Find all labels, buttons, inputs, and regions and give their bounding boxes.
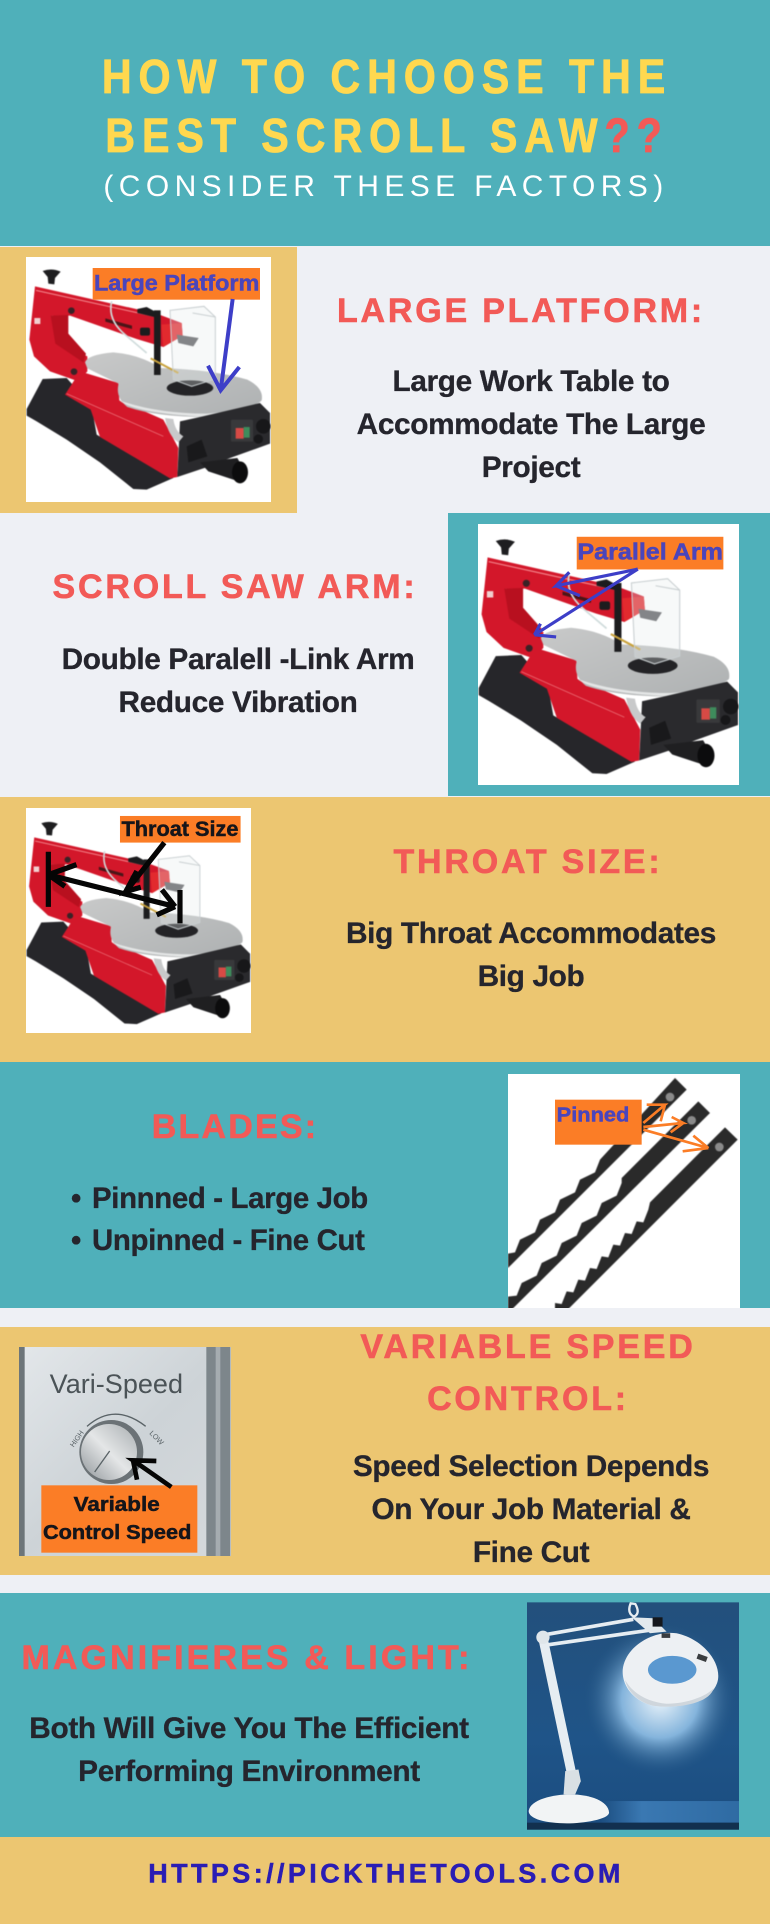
bullet list [71,1182,368,1257]
heading: LARGE PLATFORM: [337,292,705,330]
panel: variable speed control [0,1327,770,1575]
body text [62,643,414,719]
body text: Double Paralell -Link Arm [62,643,414,676]
image: speed dial [19,1347,231,1556]
image: speed dial: HIGH [68,1429,86,1449]
body text [353,1450,709,1569]
heading: CONTROL: [427,1380,629,1418]
header panel [0,0,770,246]
body text: Big Throat Accommodates [346,917,716,950]
bullet item 1: • [71,1182,81,1215]
blade strips [508,1078,738,1309]
panel: magnifiers and light [0,1593,770,1837]
heading: THROAT SIZE: [393,843,663,881]
image: speed dial: Variable [74,1494,160,1516]
body text [346,917,716,993]
footer band [0,1837,770,1924]
heading: MAGNIFIERES & LIGHT: [21,1639,473,1677]
image: scroll saw with large platform [26,257,271,502]
image: speed dial: LOW [148,1429,166,1447]
body text: Big Job [478,960,584,993]
image: scroll saw with parallel arm: Parallel Arm [577,539,723,565]
body text: Fine Cut [473,1536,589,1569]
heading: SCROLL SAW ARM: [53,568,417,606]
heading: BLADES: [152,1108,318,1146]
body text: Both Will Give You The Efficient [29,1712,469,1745]
image: scroll saw with parallel arm [478,524,739,785]
panel: large platform [0,247,770,513]
title line 2: BEST SCROLL SAW?? [105,110,669,163]
body text [29,1712,469,1788]
image backing [0,247,297,513]
body text: Project [482,451,580,484]
body text: Speed Selection Depends [353,1450,709,1483]
heading: VARIABLE SPEED [360,1328,696,1366]
panel: scroll saw arm [0,513,770,797]
image: speed dial: Control Speed [43,1522,191,1544]
image: scroll saw with throat size [26,808,251,1033]
footer url: HTTPS://PICKTHETOOLS.COM [148,1858,624,1888]
bullet item 2: Unpinned - Fine Cut [92,1224,365,1257]
title line 1: HOW TO CHOOSE THE [102,51,672,104]
body text: On Your Job Material & [371,1493,691,1526]
image: pinned blades [508,1074,740,1308]
image: pinned blades: Pinned [557,1104,629,1127]
image: scroll saw with throat size: Throat Size [122,818,238,841]
bullet item 1: Pinnned - Large Job [92,1182,368,1215]
body text: Performing Environment [78,1755,420,1788]
body text: Large Work Table to [392,365,670,398]
image: magnifier lamp [527,1602,739,1830]
body text: Accommodate The Large [357,408,705,441]
bullet item 2: • [71,1224,81,1257]
image backing [448,513,770,796]
panel: blades [0,1062,770,1308]
body text [357,365,705,484]
subtitle: (CONSIDER THESE FACTORS) [103,170,669,203]
body text: Reduce Vibration [119,686,357,719]
image: speed dial: Vari-Speed [50,1369,183,1399]
image: scroll saw with large platform: Large Platform [94,270,259,295]
panel: throat size [0,797,770,1062]
heading [360,1328,696,1418]
